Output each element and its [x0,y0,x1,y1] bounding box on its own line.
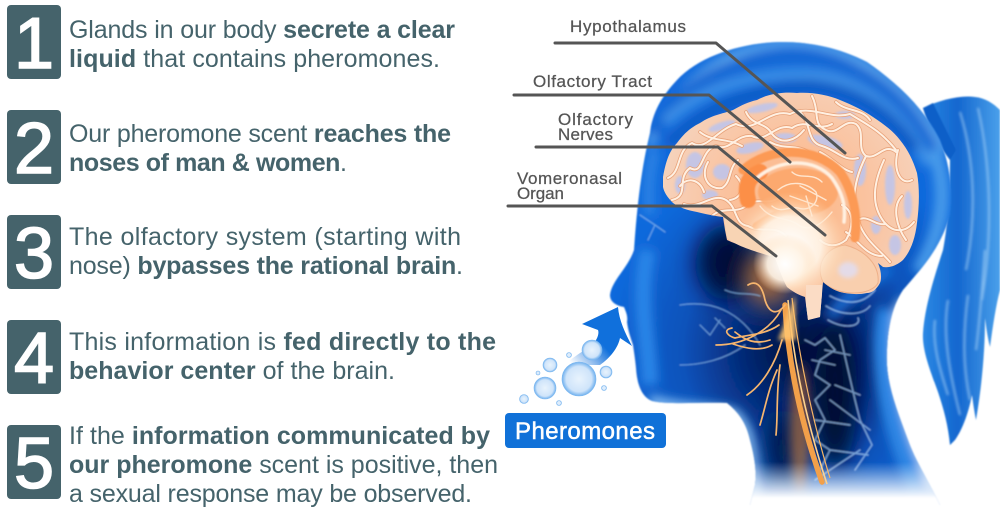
step 3 text: The olfactory system (starting with [69,223,461,251]
orange limbic bands [743,152,856,238]
callout: olfactory nerves: Olfactory [558,110,634,129]
step 2 text: noses of man & women. [69,149,347,177]
step 5 text [69,422,498,508]
sulci pockets [675,101,912,255]
step 2 [7,109,451,189]
callout: hypothalamus [555,17,845,153]
skeletal and vessel lines [640,215,875,480]
bottom fade [751,462,937,499]
ponytail [923,97,1000,445]
step 3 text: nose) bypasses the rational brain. [69,252,463,280]
step 5 [7,422,498,508]
step 2 text [69,120,451,177]
number badge 3: 3 [14,214,54,294]
callout: olfactory tract: Olfactory Tract [533,72,652,91]
cerebellum [820,245,878,293]
number badge 1: 1 [14,4,54,84]
step 1 text: liquid that contains pheromones. [69,45,440,73]
callout: olfactory tract [514,72,790,162]
pheromones label: Pheromones [515,418,655,445]
number badge 2: 2 [14,109,54,189]
face highlights [643,250,936,500]
callout: vomeronasal organ: Organ [517,184,564,203]
callout: olfactory nerves: Nerves [558,125,613,144]
step 4 [7,319,496,399]
number badge 5: 5 [14,424,54,504]
central white glow [742,195,842,295]
callout: olfactory nerves [536,110,825,235]
step 1 text: Glands in our body secrete a clear [69,16,455,44]
callout: vomeronasal organ [508,169,776,256]
hair band highlights [649,42,945,272]
head illustration [600,30,1000,509]
callout: vomeronasal organ: Vomeronasal [517,169,622,188]
number badge 4: 4 [14,319,54,399]
step 5 text: our pheromone scent is positive, then [69,451,498,479]
frontal lobe fold [724,218,775,256]
brain [663,93,919,321]
dark throat and spine shadow [696,224,857,490]
pheromone bubbles [520,340,612,406]
arrow into nose [565,307,632,365]
step 1 [7,4,455,84]
step 4 text [69,328,496,385]
step 4 text: behavior center of the brain. [69,357,395,385]
step 3 text [69,223,463,280]
step 2 text: Our pheromone scent reaches the [69,120,451,148]
step 4 text: This information is fed directly to the [69,328,496,356]
step 5 text: If the information communicated by [69,422,490,450]
brainstem glow [753,234,817,294]
step 1 text [69,16,455,73]
gyri [668,96,914,262]
spinal cord and nerves [716,283,830,484]
step 3 [7,214,463,294]
step 5 text: a sexual response may be observed. [69,480,472,508]
orange halo [744,250,792,306]
pheromones label [505,413,666,448]
callout: hypothalamus: Hypothalamus [570,17,686,36]
head silhouette [600,30,960,509]
